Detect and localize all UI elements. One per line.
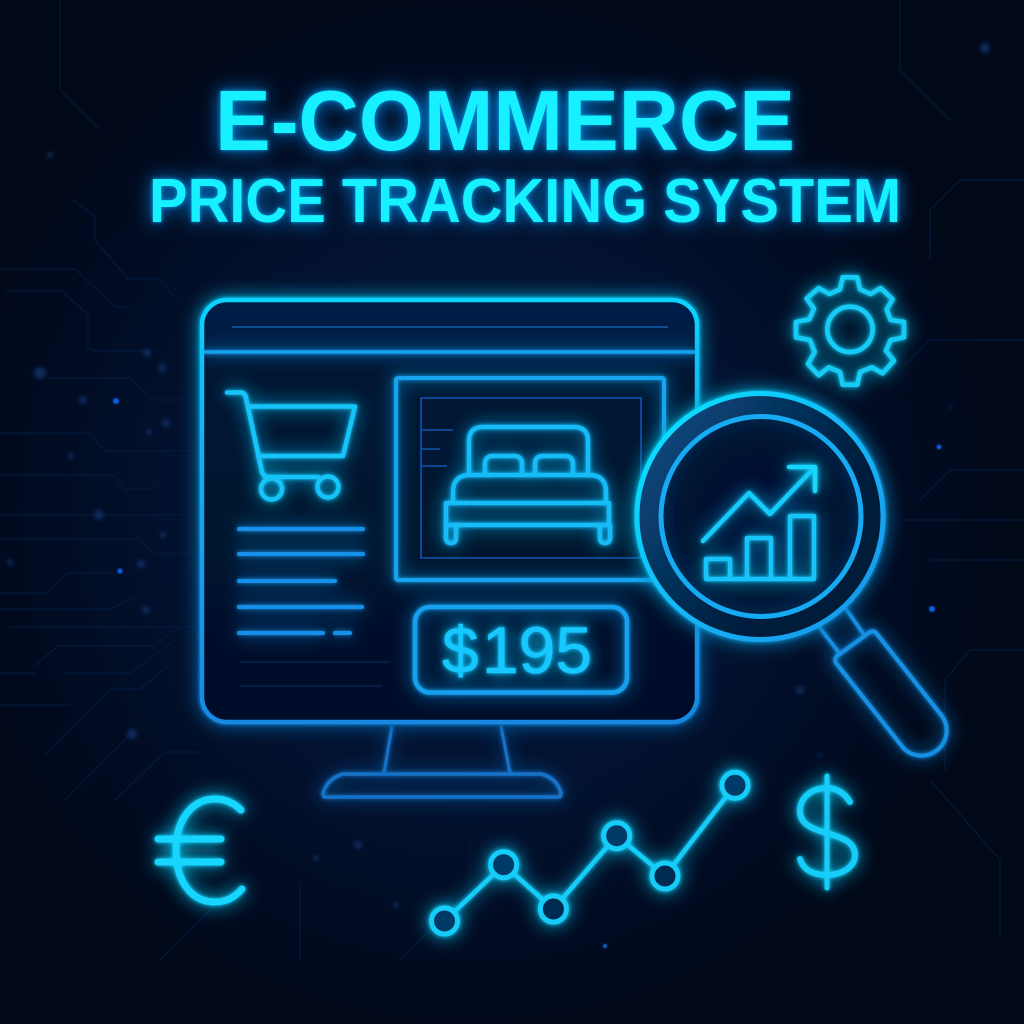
- icon: shopping cart: [227, 392, 355, 500]
- line chart: [432, 772, 748, 934]
- icon: dollar: [800, 776, 855, 888]
- browser bar: [204, 327, 695, 352]
- product text lines: [239, 529, 363, 633]
- icon: gear: [796, 277, 904, 385]
- title: [149, 74, 901, 236]
- monitor frame: [202, 300, 697, 722]
- handle: [820, 609, 947, 756]
- product image panel: [396, 378, 664, 580]
- chart in lens: [703, 467, 815, 579]
- price box: [415, 607, 627, 692]
- price: $: [442, 613, 479, 687]
- title line 2: PRICE TRACKING SYSTEM: [149, 167, 901, 236]
- icon: euro: [158, 799, 242, 902]
- title line 1: E-COMMERCE: [215, 74, 795, 169]
- monitor stand: [323, 726, 561, 797]
- icon: magnifying glass: [637, 394, 947, 756]
- price: 195: [482, 613, 592, 687]
- icon: bed: [446, 427, 610, 543]
- lens: [637, 394, 883, 640]
- monitor: [202, 300, 697, 797]
